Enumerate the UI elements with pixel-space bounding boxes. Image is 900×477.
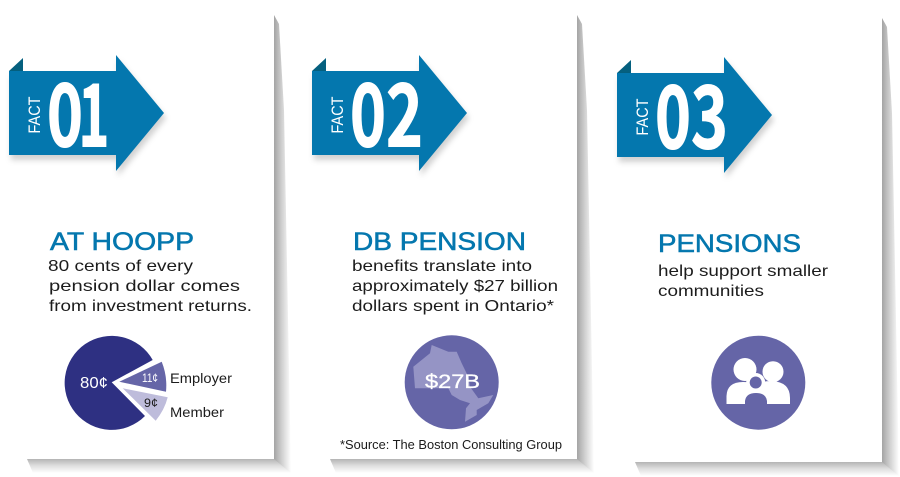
arrow badge: fact 03: FACT [634,98,652,136]
panel: fact 01 [9,15,291,473]
pie chart: pension dollar sources: 11¢ [142,373,158,385]
arrow badge: fact 02: 2 [386,46,423,172]
source note: *Source: The Boston Consulting Group [340,438,562,452]
arrow badge: fact 02 [312,46,467,172]
arrow badge: fact 03: 0 [655,48,691,174]
pie chart: pension dollar sources [65,336,233,430]
text block: fact 03 description: help support smaller [658,263,829,280]
panel: fact 02 [312,15,594,473]
arrow badge: fact 01: 0 [47,46,83,172]
text block: fact 01 description [48,258,252,315]
arrow badge: fact 02: 0 [350,46,386,172]
text block: fact 02 description: dollars spent in Ontario* [352,298,554,315]
pie chart: pension dollar sources: Member [170,405,225,420]
text block: fact 01 description: from investment returns. [49,298,252,315]
pie chart: pension dollar sources: 9¢ [144,398,158,410]
text block: fact 01 description: 80 cents of every [48,258,193,275]
text block: fact 03 description [658,263,829,300]
heading: db pension: DB PENSION [353,228,526,256]
heading: at hoopp: AT HOOPP [50,228,194,256]
icon: ontario map circle: $27B [425,372,480,393]
pie chart: pension dollar sources: Employer [170,371,233,386]
arrow badge: fact 03 [617,48,772,174]
text block: fact 02 description: approximately $27 billion [352,278,558,295]
heading: pensions: PENSIONS [658,230,801,258]
arrow badge: fact 01: FACT [26,96,44,134]
arrow badge: fact 02: FACT [329,96,347,134]
pie chart: pension dollar sources: 80¢ [80,375,108,392]
text block: fact 01 description: pension dollar comes [49,278,240,295]
arrow badge: fact 01 [9,46,164,172]
icon: ontario map circle [405,335,499,429]
icon: people circle [711,336,805,430]
text block: fact 02 description: benefits translate into [352,258,532,275]
arrow badge: fact 03: 3 [691,48,728,174]
text block: fact 03 description: communities [658,283,764,300]
text block: fact 02 description [352,258,558,315]
panel: fact 03 [617,18,899,476]
arrow badge: fact 01: 1 [78,46,109,172]
